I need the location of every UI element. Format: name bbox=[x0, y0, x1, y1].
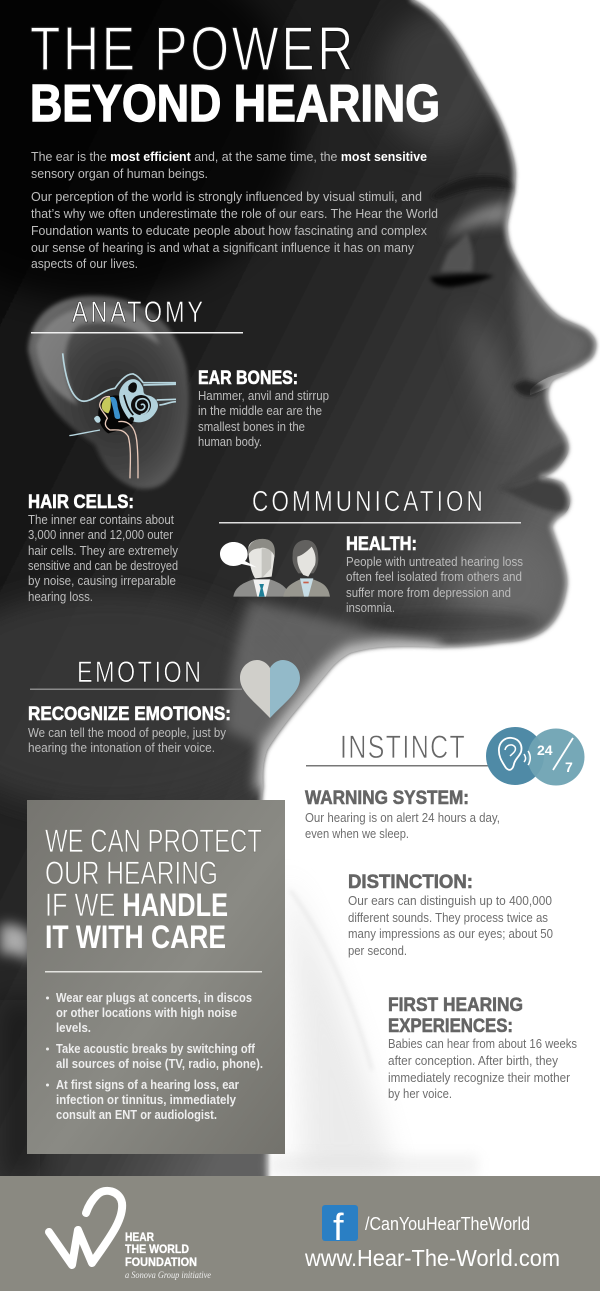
shading: shoulder streak bbox=[0, 924, 30, 962]
panel heading: OUR HEARING bbox=[45, 855, 218, 891]
intro text bbox=[31, 149, 438, 271]
text: hair cells: The inner ear contains about bbox=[28, 512, 174, 527]
heading: emotion: EMOTION bbox=[77, 655, 201, 689]
text: health: HEALTH: bbox=[346, 534, 417, 555]
icon: inner ear diagram bbox=[63, 353, 176, 478]
bullet list: Take acoustic breaks by switching off bbox=[56, 1041, 256, 1056]
shading: forehead bbox=[380, 10, 500, 150]
logo text: FOUNDATION bbox=[125, 1257, 197, 1269]
logo: brush W bbox=[49, 1191, 122, 1265]
intro text: aspects of our lives. bbox=[31, 256, 138, 271]
text: health: insomnia. bbox=[346, 600, 395, 615]
shading: neck highlight bbox=[221, 597, 410, 748]
text: first hearing experiences: FIRST HEARING bbox=[388, 995, 523, 1016]
icon: ear and 24/7 circles: 24 bbox=[537, 742, 553, 758]
speech bubble bbox=[220, 542, 257, 567]
text: warning system bbox=[305, 788, 500, 841]
section: emotion bbox=[28, 655, 300, 755]
eyelashes bbox=[430, 274, 494, 287]
icon: ear and 24/7 circles bbox=[486, 727, 584, 786]
text: distinction: DISTINCTION: bbox=[348, 872, 473, 893]
bullet list: or other locations with high noise bbox=[56, 1005, 237, 1020]
heading: communication: COMMUNICATION bbox=[252, 484, 483, 518]
text: health: suffer more from depression and bbox=[346, 585, 511, 600]
text: ear bones: smallest bones in the bbox=[198, 419, 305, 434]
bullet list: all sources of noise (TV, radio, phone). bbox=[56, 1056, 263, 1071]
text: distinction: per second. bbox=[348, 943, 407, 958]
lips bbox=[508, 443, 568, 485]
text: hair cells: hearing loss. bbox=[28, 589, 93, 604]
text: distinction: Our ears can distinguish up to 400,000 bbox=[348, 893, 552, 908]
heading: instinct: INSTINCT bbox=[340, 730, 465, 766]
title line 2: BEYOND HEARING bbox=[30, 75, 440, 133]
bullet list: At first signs of a hearing loss, ear bbox=[56, 1077, 239, 1092]
text: ear bones: Hammer, anvil and stirrup bbox=[198, 388, 329, 403]
icon: ear and 24/7 circles: 7 bbox=[565, 759, 573, 775]
shading: lower left lighter bbox=[0, 590, 300, 810]
section: instinct bbox=[305, 727, 584, 1101]
ear bbox=[28, 296, 189, 489]
intro text: Our perception of the world is strongly influenced by visual stimuli, and bbox=[31, 189, 422, 204]
text: first hearing experiences: Babies can hear from about 16 weeks bbox=[388, 1036, 577, 1051]
text: hair cells: 3,000 inner and 12,000 outer bbox=[28, 527, 174, 542]
panel: protect our hearing bbox=[27, 800, 285, 1154]
shading: cheek bbox=[461, 322, 512, 425]
bullet list bbox=[46, 990, 263, 1122]
text: distinction: different sounds. They process twice as bbox=[348, 910, 548, 925]
man bbox=[233, 579, 290, 597]
icon: heart bbox=[240, 660, 300, 718]
icon: two people talking bbox=[220, 539, 330, 597]
logo text: a Sonova Group initiative bbox=[125, 1270, 211, 1280]
shading: rim light bbox=[256, 0, 596, 1176]
text: hair cells: sensitive and can be destroyed bbox=[28, 558, 178, 573]
text: health: People with untreated hearing loss bbox=[346, 554, 523, 569]
shading: chin bbox=[454, 542, 536, 610]
text: ear bones: in the middle ear are the bbox=[198, 403, 322, 418]
section: anatomy bbox=[28, 295, 329, 604]
panel heading: WE CAN PROTECT bbox=[45, 823, 262, 859]
text: hair cells bbox=[28, 492, 178, 604]
text: ear bones: human body. bbox=[198, 434, 262, 449]
section: communication bbox=[219, 484, 523, 615]
text: warning system: Our hearing is on alert 24 hours a day, bbox=[305, 810, 500, 825]
text: recognize emotions: hearing the intonation of their voice. bbox=[28, 740, 215, 755]
text: ear bones: EAR BONES: bbox=[198, 368, 298, 389]
intro text: sensory organ of human beings. bbox=[31, 166, 208, 181]
title line 1: THE POWER bbox=[30, 14, 353, 83]
panel heading bbox=[45, 823, 262, 955]
woman bbox=[283, 579, 330, 597]
intro text: The ear is the most efficient and, at the same time, the most sensitive bbox=[31, 149, 427, 164]
shading: dark upper left bbox=[0, 0, 300, 300]
icon: facebook bbox=[322, 1205, 358, 1249]
text: distinction: many impressions as our eyes; about 50 bbox=[348, 926, 553, 941]
text: health bbox=[346, 534, 523, 615]
text: warning system: even when we sleep. bbox=[305, 826, 409, 841]
text: ear bones bbox=[198, 368, 329, 449]
facebook handle: /CanYouHearTheWorld bbox=[365, 1214, 530, 1234]
bullet list: Wear ear plugs at concerts, in discos bbox=[56, 990, 252, 1005]
footer band bbox=[0, 1176, 600, 1291]
shading: collarbone curves bbox=[285, 875, 395, 1176]
text: distinction bbox=[348, 872, 553, 958]
text: hair cells: by noise, causing irreparable bbox=[28, 573, 176, 588]
website: www.Hear-The-World.com bbox=[304, 1245, 560, 1271]
logo text bbox=[125, 1232, 211, 1280]
intro text: that’s why we often underestimate the role of our ears. The Hear the World bbox=[31, 206, 438, 221]
bullet list: levels. bbox=[56, 1020, 91, 1035]
nostril bbox=[530, 372, 568, 395]
panel heading: IT WITH CARE bbox=[45, 919, 226, 955]
bullet list: consult an ENT or audiologist. bbox=[56, 1107, 217, 1122]
text: recognize emotions: We can tell the mood of people, just by bbox=[28, 725, 226, 740]
shading: eyebrow bbox=[430, 176, 514, 200]
text: hair cells: hair cells. They are extremely bbox=[28, 543, 178, 558]
text: first hearing experiences: by her voice. bbox=[388, 1086, 452, 1101]
title bbox=[30, 14, 440, 133]
logo text: THE WORLD bbox=[125, 1244, 189, 1256]
panel heading: IF WE HANDLE bbox=[45, 887, 228, 923]
intro text: our sense of hearing is and what a significant influence it has on many bbox=[31, 240, 414, 255]
text: hair cells: HAIR CELLS: bbox=[28, 492, 134, 513]
heading: anatomy: ANATOMY bbox=[72, 295, 203, 329]
text: first hearing experiences: after conception. After birth, they bbox=[388, 1053, 558, 1068]
bullet list: infection or tinnitus, immediately bbox=[56, 1092, 237, 1107]
text: warning system: WARNING SYSTEM: bbox=[305, 788, 469, 809]
text: first hearing experiences: EXPERIENCES: bbox=[388, 1016, 513, 1037]
text: first hearing experiences: immediately recognize their mother bbox=[388, 1070, 571, 1085]
text: health: often feel isolated from others and bbox=[346, 569, 522, 584]
text: recognize emotions bbox=[28, 704, 231, 755]
shading: eyelid bbox=[440, 232, 473, 272]
shading: nose bbox=[515, 262, 590, 385]
text: first hearing experiences bbox=[388, 995, 577, 1101]
logo text: HEAR bbox=[125, 1232, 155, 1244]
text: recognize emotions: RECOGNIZE EMOTIONS: bbox=[28, 704, 231, 725]
intro text: Foundation wants to educate people about how fascinating and complex bbox=[31, 223, 427, 238]
shading: brow bone highlight bbox=[445, 203, 512, 238]
icon: facebook: f bbox=[333, 1207, 344, 1249]
